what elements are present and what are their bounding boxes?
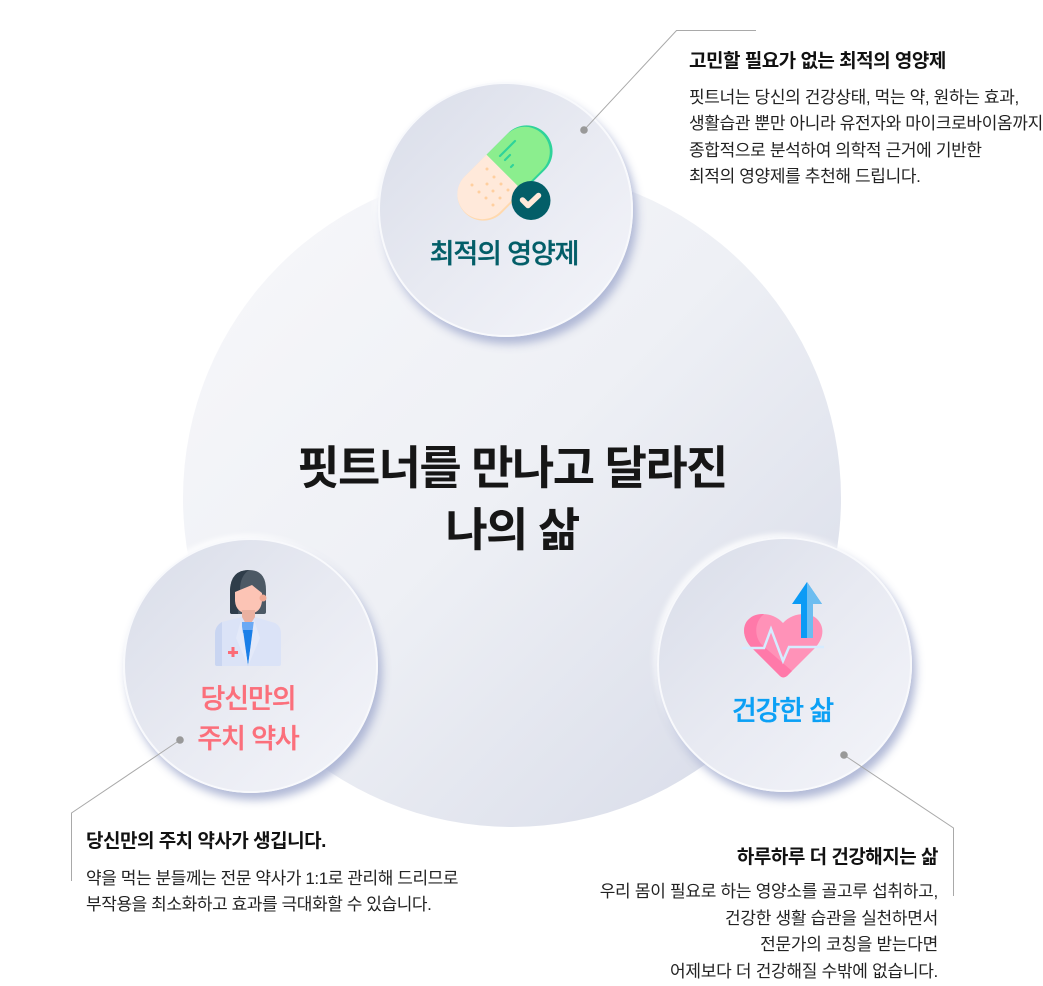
- panel: right circle, healthy life: [657, 537, 912, 792]
- label: healthy life: 건강한 삶: [732, 696, 833, 726]
- panel: left circle, personal pharmacist: [123, 538, 378, 793]
- heading: pharmacist: 당신만의 주치 약사가 생깁니다.: [86, 831, 326, 852]
- panel: large central circle: [183, 169, 841, 827]
- body text: optimal supplements: 핏트너는 당신의 건강상태, 먹는 약, 원하는 효과,: [689, 88, 1019, 107]
- label: your own pharmacist: [197, 684, 300, 754]
- panel: top circle, optimal supplements: [378, 82, 633, 337]
- icon: capsule with check badge: [457, 125, 553, 221]
- heading: optimal supplements: 고민할 필요가 없는 최적의 영양제: [689, 51, 946, 72]
- text block: pharmacist: [86, 831, 458, 914]
- label: your own pharmacist: 당신만의: [201, 684, 295, 714]
- body text: healthy life: 건강한 생활 습관을 실천하면서: [725, 909, 938, 928]
- body text: optimal supplements: 생활습관 뿐만 아니라 유전자와 마이크로바이옴까지: [689, 114, 1043, 133]
- body text: healthy life: 전문가의 코칭을 받는다면: [760, 935, 938, 954]
- body text: optimal supplements: [689, 88, 1043, 186]
- body text: pharmacist: 부작용을 최소화하고 효과를 극대화할 수 있습니다.: [86, 895, 431, 914]
- heading: healthy life: 하루하루 더 건강해지는 삶: [737, 847, 938, 868]
- body text: pharmacist: [86, 869, 458, 914]
- text block: healthy life: [600, 847, 938, 981]
- label: your own pharmacist: 주치 약사: [197, 724, 299, 754]
- body text: optimal supplements: 종합적으로 분석하여 의학적 근거에 기반한: [689, 141, 982, 160]
- body text: healthy life: 우리 몸이 필요로 하는 영양소를 골고루 섭취하고,: [600, 882, 938, 901]
- title: [297, 442, 727, 556]
- body text: optimal supplements: 최적의 영양제를 추천해 드립니다.: [689, 167, 921, 186]
- icon: heart with upward arrow: [742, 582, 824, 678]
- title: 나의 삶: [445, 504, 579, 556]
- title: 핏트너를 만나고 달라진: [297, 442, 727, 494]
- body text: healthy life: [600, 882, 938, 981]
- text block: optimal supplements: [689, 51, 1043, 186]
- label: optimal supplements: 최적의 영양제: [430, 239, 578, 269]
- body text: healthy life: 어제보다 더 건강해질 수밖에 없습니다.: [670, 962, 938, 981]
- icon: female pharmacist: [215, 570, 281, 666]
- body text: pharmacist: 약을 먹는 분들께는 전문 약사가 1:1로 관리해 드리므로: [86, 869, 458, 888]
